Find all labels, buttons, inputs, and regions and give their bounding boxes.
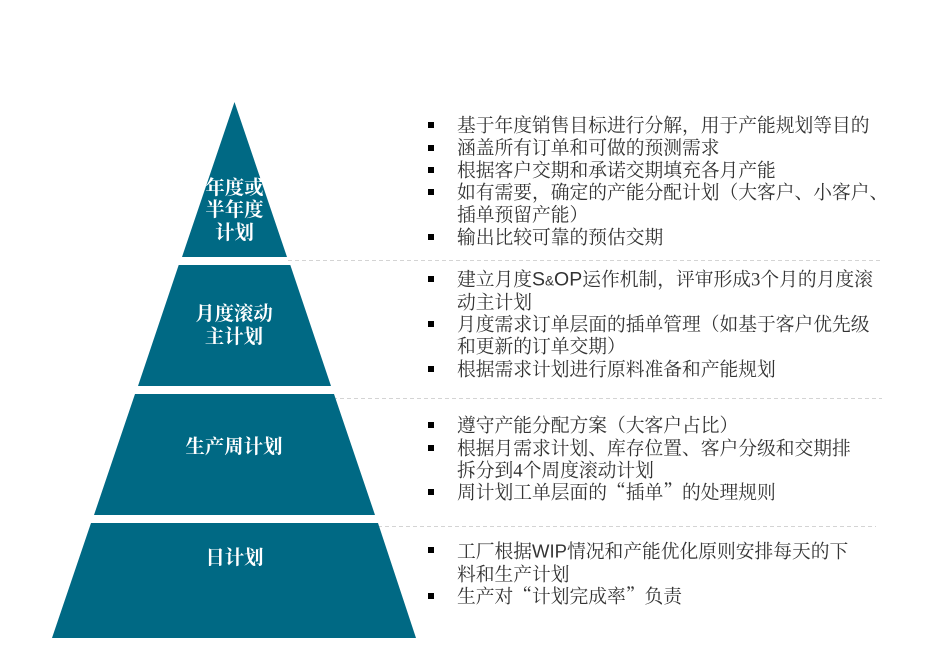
pyramid tier 2: monthly rolling master plan: 月度滚动 xyxy=(195,302,273,325)
pyramid tier 4: daily plan: 日计划 xyxy=(205,547,264,569)
bullet list: weekly production plan xyxy=(428,414,851,504)
pyramid tier 2: monthly rolling master plan: 主计划 xyxy=(205,326,263,348)
bullet list: annual plan: 涵盖所有订单和可做的预测需求 xyxy=(457,137,720,159)
pyramid tier 1: annual or half-year plan: 计划 xyxy=(215,222,254,244)
bullet list: weekly production plan: 根据月需求计划、库存位置、客户分级和交期排 xyxy=(457,438,851,460)
bullet list: annual plan: 输出比较可靠的预估交期 xyxy=(457,226,663,248)
bullet list: daily plan: 工厂根据WIP情况和产能优化原则安排每天的下 xyxy=(457,540,848,562)
bullet list: monthly rolling plan: 月度需求订单层面的插单管理（如基于客户优先级 xyxy=(457,314,870,336)
pyramid tier 1: annual or half-year plan xyxy=(182,102,287,257)
bullet list: monthly rolling plan: 建立月度S&OP运作机制，评审形成3个月的月度滚 xyxy=(457,268,873,290)
bullet list: monthly rolling plan: 根据需求计划进行原料准备和产能规划 xyxy=(457,358,776,380)
bullet list: monthly rolling plan: 和更新的订单交期） xyxy=(457,336,626,358)
pyramid tier 4: daily plan xyxy=(52,523,416,638)
pyramid diagram xyxy=(52,102,416,638)
pyramid tier 3: weekly production plan: 生产周计划 xyxy=(186,436,282,458)
bullet list: weekly production plan: 遵守产能分配方案（大客户占比） xyxy=(457,414,738,436)
bullet list: monthly rolling plan xyxy=(428,268,873,380)
bullet list: annual plan: 根据客户交期和承诺交期填充各月产能 xyxy=(457,160,776,182)
bullet list: annual plan: 插单预留产能） xyxy=(457,204,588,226)
bullet list: weekly production plan: 周计划工单层面的“插单”的处理规则 xyxy=(457,478,776,504)
bullet list: annual plan: 基于年度销售目标进行分解，用于产能规划等目的 xyxy=(457,114,870,136)
pyramid tier 2: monthly rolling master plan xyxy=(138,265,331,386)
bullet list: daily plan: 生产对“计划完成率”负责 xyxy=(457,582,683,608)
pyramid tier 1: annual or half-year plan: 年度或 xyxy=(205,176,264,199)
bullet list: daily plan: 料和生产计划 xyxy=(457,564,570,586)
bullet list: monthly rolling plan: 动主计划 xyxy=(457,292,532,314)
bullet list: annual plan xyxy=(428,114,888,248)
bullet list: weekly production plan: 拆分到4个周度滚动计划 xyxy=(457,460,654,482)
pyramid tier 3: weekly production plan xyxy=(94,394,375,515)
bullet list: annual plan: 如有需要，确定的产能分配计划（大客户、小客户、 xyxy=(457,182,888,204)
pyramid tier 1: annual or half-year plan: 半年度 xyxy=(205,198,264,221)
bullet list: daily plan xyxy=(428,540,848,608)
